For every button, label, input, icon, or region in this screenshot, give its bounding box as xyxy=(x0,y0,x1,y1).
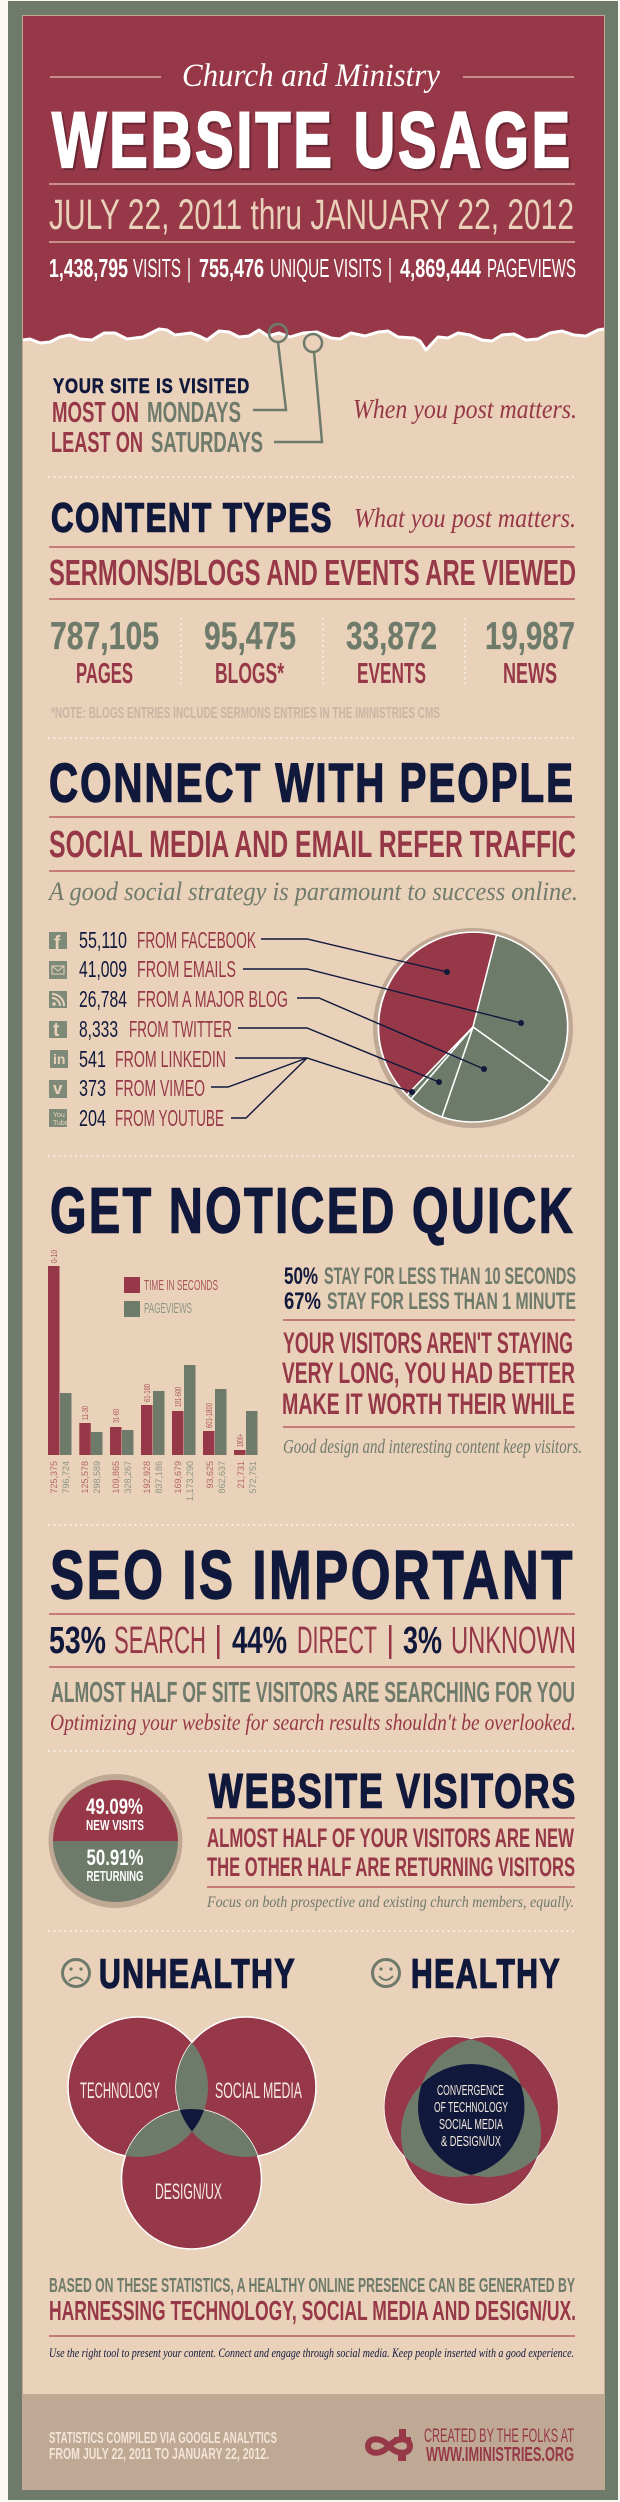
referral list: FROM LINKEDIN xyxy=(115,1046,226,1072)
green value labels: 328,267 xyxy=(123,1461,133,1494)
icon: youtube: You xyxy=(53,1112,65,1119)
red value labels: 109,865 xyxy=(111,1461,121,1494)
kicker: Church and Ministry: Church and Ministry xyxy=(182,58,440,94)
totals line: 1,438,795 xyxy=(49,253,128,283)
time range labels: 31-60 xyxy=(112,1409,121,1423)
section: get noticed quick xyxy=(48,1174,582,1501)
icon: linkedin xyxy=(50,1050,68,1068)
stay duration stats xyxy=(284,1263,576,1315)
venn diagram: unhealthy: TECHNOLOGY xyxy=(80,2078,160,2103)
pie chart xyxy=(373,928,573,1128)
data source note xyxy=(49,2430,277,2463)
traffic source split: SEARCH xyxy=(114,1620,206,1662)
tagline: social strategy: A good social strategy is paramount to success online. xyxy=(47,877,578,906)
social icons xyxy=(49,932,69,1127)
referral list: FROM A MAJOR BLOG xyxy=(137,986,288,1012)
totals line: VISITS xyxy=(133,253,181,283)
stat numbers: 787,105 xyxy=(50,615,159,658)
traffic source split: 53% xyxy=(49,1620,106,1662)
red value labels: 192,928 xyxy=(142,1461,152,1494)
referral list: 26,784 xyxy=(79,986,127,1012)
stat labels: BLOGS* xyxy=(215,658,284,690)
referral list: FROM TWITTER xyxy=(129,1016,232,1042)
leader lines xyxy=(211,939,524,1118)
callout: visitors not staying xyxy=(282,1327,575,1421)
referral list: 541 xyxy=(79,1046,106,1072)
section: content types xyxy=(49,494,576,722)
heading: unhealthy: UNHEALTHY xyxy=(99,1950,296,1996)
icon: linkedin: in xyxy=(53,1051,65,1067)
pie: new versus returning: NEW VISITS xyxy=(86,1817,144,1834)
time range labels: 601-1800 xyxy=(205,1403,214,1428)
stay duration stats: 67% xyxy=(284,1288,321,1315)
icon: twitter: t xyxy=(53,1020,60,1041)
totals line: | xyxy=(187,253,191,283)
stat labels: EVENTS xyxy=(357,658,426,690)
stat labels: PAGES xyxy=(76,658,133,690)
traffic source split xyxy=(49,1620,576,1662)
referral list: 204 xyxy=(79,1105,106,1131)
stat numbers: 33,872 xyxy=(346,615,437,658)
icon: iministries logo xyxy=(368,2429,411,2461)
when-visited text: LEAST ON xyxy=(51,427,143,459)
traffic source split: 44% xyxy=(232,1620,287,1662)
heading: content types: CONTENT TYPES xyxy=(51,494,333,540)
time range labels: 1800+ xyxy=(236,1434,245,1447)
tagline: what you post matters: What you post matters. xyxy=(354,503,576,533)
venn diagram: healthy: CONVERGENCE xyxy=(437,2082,504,2099)
venn diagram: healthy xyxy=(384,2037,558,2204)
conclusion text xyxy=(49,2274,576,2326)
time range labels xyxy=(50,1250,245,1447)
icon: vimeo xyxy=(49,1079,67,1098)
referral list: 8,333 xyxy=(79,1016,118,1042)
bars: pageviews xyxy=(60,1365,258,1455)
green value labels: 862,637 xyxy=(217,1461,227,1494)
icon: youtube xyxy=(49,1109,69,1127)
green value labels: 837,186 xyxy=(154,1461,164,1494)
when-visited text: MONDAYS xyxy=(147,397,241,429)
chart legend: TIME IN SECONDS xyxy=(144,1278,218,1294)
pie: new versus returning xyxy=(48,1774,182,1908)
stat labels: NEWS xyxy=(503,658,557,690)
tagline: focus on both: Focus on both prospective and existing church members, equally. xyxy=(206,1894,574,1911)
icon: sad face xyxy=(62,1960,90,1986)
green value labels: 572,751 xyxy=(248,1461,258,1494)
header rules xyxy=(49,77,575,242)
icon: youtube: Tube xyxy=(53,1120,69,1127)
heading: healthy: HEALTHY xyxy=(411,1950,561,1996)
stat numbers: 95,475 xyxy=(204,615,296,658)
footer panel xyxy=(23,2394,604,2489)
red value labels: 21,731 xyxy=(236,1461,246,1489)
red value labels: 93,625 xyxy=(205,1461,215,1489)
icon: facebook: f xyxy=(54,933,61,954)
pointer lines to weekdays xyxy=(253,324,322,442)
bar chart xyxy=(48,1250,258,1501)
section: website visitors xyxy=(48,1766,577,1911)
data source note: FROM JULY 22, 2011 TO JANUARY 22, 2012. xyxy=(49,2446,269,2463)
when-visited text xyxy=(51,375,263,459)
time range labels: 11-30 xyxy=(81,1406,90,1420)
time range labels: 61-180 xyxy=(143,1384,152,1402)
traffic source split: 3% xyxy=(403,1620,442,1662)
venn diagram: healthy: & DESIGN/UX xyxy=(441,2133,501,2150)
chart legend xyxy=(124,1277,218,1317)
referral list: 373 xyxy=(79,1075,106,1101)
section: unhealthy versus healthy xyxy=(49,1950,576,2360)
red value labels: 169,679 xyxy=(173,1461,183,1494)
icon: email xyxy=(49,961,67,979)
totals line: UNIQUE VISITS xyxy=(270,253,382,283)
when-visited text: SATURDAYS xyxy=(151,427,263,459)
credit xyxy=(424,2426,574,2466)
referral list: FROM YOUTUBE xyxy=(115,1105,224,1131)
when-visited text: YOUR SITE IS VISITED xyxy=(53,375,250,398)
pie: new versus returning: 49.09% xyxy=(86,1794,143,1819)
referral list: FROM FACEBOOK xyxy=(137,927,256,953)
red value labels: 125,578 xyxy=(80,1461,90,1494)
header banner xyxy=(23,16,604,350)
red value labels: 725,375 xyxy=(49,1461,59,1494)
referral list: FROM VIMEO xyxy=(115,1075,205,1101)
data source note: STATISTICS COMPILED VIA GOOGLE ANALYTICS xyxy=(49,2430,277,2447)
red value labels xyxy=(49,1461,246,1494)
stat numbers: 19,987 xyxy=(485,615,575,658)
visitors summary xyxy=(207,1823,575,1882)
icon: twitter xyxy=(49,1020,67,1041)
referral list: FROM EMAILS xyxy=(137,956,236,982)
totals line xyxy=(49,253,576,283)
pie: new versus returning: RETURNING xyxy=(86,1868,144,1885)
section: connect with people xyxy=(47,752,578,1131)
section: seo xyxy=(49,1536,576,1735)
stay duration stats: 50% xyxy=(284,1263,318,1290)
venn diagram: unhealthy: DESIGN/UX xyxy=(155,2179,222,2204)
totals line: 4,869,444 xyxy=(400,253,481,283)
when-visited text: MOST ON xyxy=(52,397,139,429)
icon: vimeo: v xyxy=(53,1079,63,1098)
pie: new versus returning: 50.91% xyxy=(86,1845,144,1870)
traffic source split: DIRECT xyxy=(297,1620,377,1662)
referral list: 41,009 xyxy=(79,956,127,982)
referral list: 55,110 xyxy=(79,927,127,953)
tagline: when you post matters: When you post matters. xyxy=(353,394,577,424)
venn diagram: unhealthy xyxy=(68,2017,316,2249)
bars: time in seconds xyxy=(48,1266,246,1455)
time range labels: 181-600 xyxy=(174,1387,183,1407)
icon: facebook xyxy=(49,932,67,954)
venn diagram: healthy: SOCIAL MEDIA xyxy=(439,2116,503,2133)
referral list xyxy=(79,927,288,1131)
icon: rss xyxy=(49,991,67,1008)
icon: happy face xyxy=(372,1960,400,1986)
green value labels: 796,724 xyxy=(61,1461,71,1494)
green value labels: 1,173,290 xyxy=(185,1461,195,1501)
green value labels: 298,589 xyxy=(92,1461,102,1494)
stat numbers xyxy=(50,615,575,658)
green value labels xyxy=(61,1461,258,1501)
venn diagram: unhealthy: SOCIAL MEDIA xyxy=(215,2078,302,2103)
totals line: 755,476 xyxy=(199,253,264,283)
stat labels xyxy=(76,658,557,690)
totals line: | xyxy=(388,253,392,283)
chart legend: PAGEVIEWS xyxy=(144,1301,192,1317)
time range labels: 0-10 xyxy=(50,1250,59,1263)
venn diagram: healthy: OF TECHNOLOGY xyxy=(434,2099,508,2116)
